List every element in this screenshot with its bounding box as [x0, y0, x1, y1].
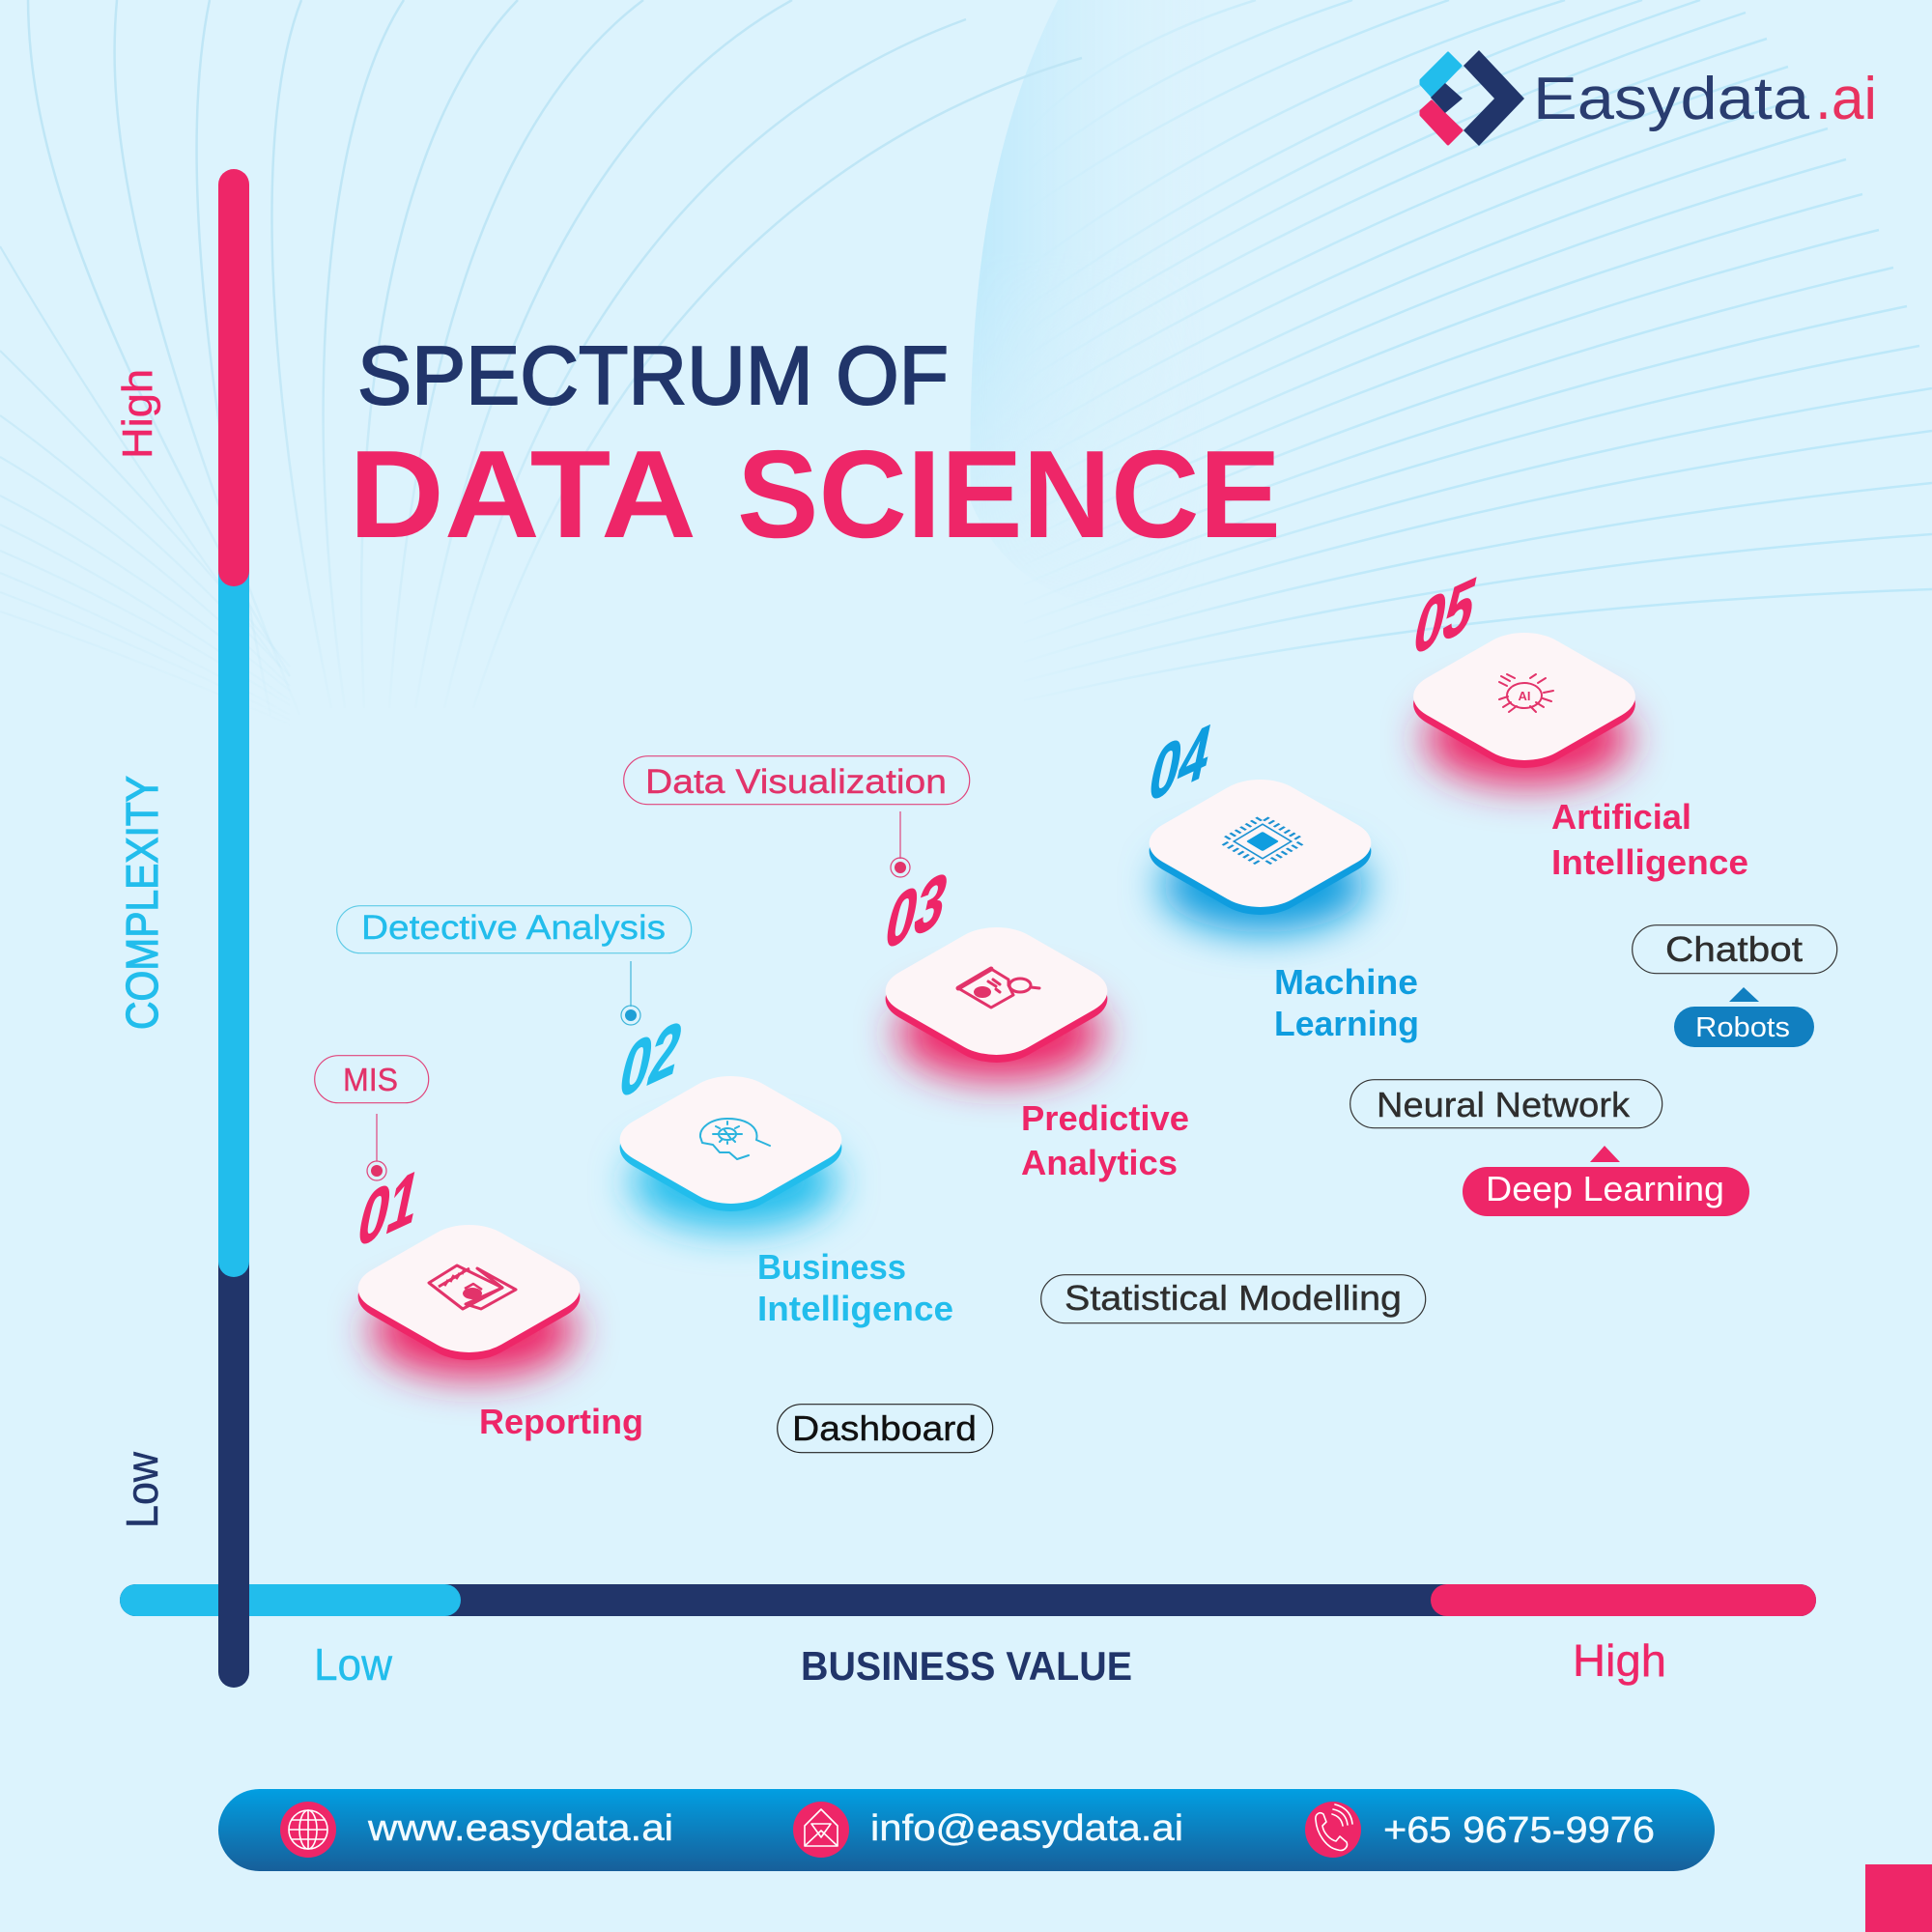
callout: Data Visualization [624, 756, 970, 877]
label: Predictive Analytics: Analytics [1021, 1143, 1178, 1182]
title: SCIENCE [737, 425, 1281, 564]
label: Business Intelligence [757, 1247, 953, 1328]
pill: Chatbot: Chatbot [1665, 929, 1803, 969]
text: email: info@easydata.ai [870, 1808, 1183, 1849]
number 02: 02 [612, 1004, 689, 1117]
step 04: machine learning platform [1130, 707, 1390, 932]
icon: chart with magnifier [958, 969, 1039, 1008]
horizontal axis labels [314, 1635, 1666, 1690]
icon: head with brain [700, 1119, 770, 1159]
step 03: predictive analytics platform [867, 855, 1126, 1080]
logo: Easydata.ai: .ai [1815, 66, 1877, 132]
label: Reporting: Reporting [479, 1402, 643, 1441]
vertical axis labels: Low [117, 1451, 167, 1528]
title: SPECTRUM OF [357, 330, 949, 422]
pill: Deep Learning with arrow [1463, 1146, 1749, 1216]
pill: Deep Learning with arrow: Deep Learning [1486, 1169, 1724, 1208]
number 03: 03 [878, 855, 954, 968]
text: phone number: +65 9675-9976 [1383, 1810, 1655, 1851]
step 02: business intelligence platform [601, 1004, 861, 1229]
label: Business Intelligence: Intelligence [757, 1289, 953, 1328]
number 05: 05 [1406, 560, 1483, 673]
vertical axis labels [114, 369, 167, 1528]
horizontal axis: business value bar [120, 1584, 1816, 1616]
icon: globe [280, 1802, 336, 1858]
label: Artificial Intelligence: Intelligence [1551, 842, 1748, 882]
label: Artificial Intelligence [1551, 797, 1748, 882]
label: Machine Learning: Learning [1274, 1004, 1419, 1043]
number 01: 01 [351, 1152, 427, 1265]
vertical axis: complexity bar [218, 169, 249, 1688]
corner accent square [1865, 1864, 1932, 1932]
vertical axis labels: COMPLEXITY [117, 776, 167, 1030]
callout: MIS: MIS [343, 1062, 398, 1097]
pill: Neural Network [1350, 1080, 1662, 1128]
label: Machine Learning [1274, 962, 1419, 1043]
title: DATA [349, 425, 696, 564]
icon: phone [1305, 1802, 1361, 1858]
footer contact bar [218, 1789, 1715, 1871]
horizontal axis labels: BUSINESS VALUE [801, 1643, 1132, 1689]
callout: Detective Analysis: Detective Analysis [361, 909, 666, 947]
icon: processor chip [1222, 817, 1303, 866]
label: Artificial Intelligence: Artificial [1551, 797, 1691, 837]
step 05: artificial intelligence platform [1395, 560, 1654, 785]
label: Predictive Analytics [1021, 1098, 1189, 1182]
icon: report panels [429, 1265, 516, 1309]
pill: Statistical Modelling: Statistical Modelling [1065, 1278, 1402, 1318]
text: website: www.easydata.ai [367, 1808, 673, 1849]
horizontal axis labels: Low [314, 1639, 393, 1690]
vertical axis labels: High [114, 369, 161, 459]
icon: AI circuit brain: AI [1519, 689, 1530, 703]
callout: MIS [315, 1056, 429, 1180]
pill: Robots with arrow: Robots [1695, 1012, 1790, 1043]
label: Machine Learning: Machine [1274, 962, 1418, 1002]
pill: Dashboard [778, 1405, 993, 1453]
pill: Dashboard: Dashboard [792, 1408, 977, 1448]
label: Predictive Analytics: Predictive [1021, 1098, 1189, 1138]
horizontal axis labels: High [1573, 1635, 1666, 1686]
step 01: reporting platform [339, 1152, 599, 1378]
pill: Chatbot [1633, 925, 1837, 974]
callout: Data Visualization: Data Visualization [645, 763, 947, 801]
logo: Easydata.ai [1421, 50, 1877, 146]
pill: Neural Network: Neural Network [1377, 1085, 1631, 1124]
pill: Statistical Modelling [1041, 1275, 1426, 1323]
pill: Robots with arrow [1674, 987, 1814, 1047]
title [349, 330, 1281, 564]
icon: AI circuit brain [1499, 674, 1553, 712]
callout: Detective Analysis [337, 906, 692, 1025]
label: Business Intelligence: Business [757, 1247, 906, 1287]
icon: envelope [793, 1802, 849, 1858]
logo: Easydata.ai: Easydata [1533, 66, 1810, 132]
number 04: 04 [1142, 707, 1218, 820]
